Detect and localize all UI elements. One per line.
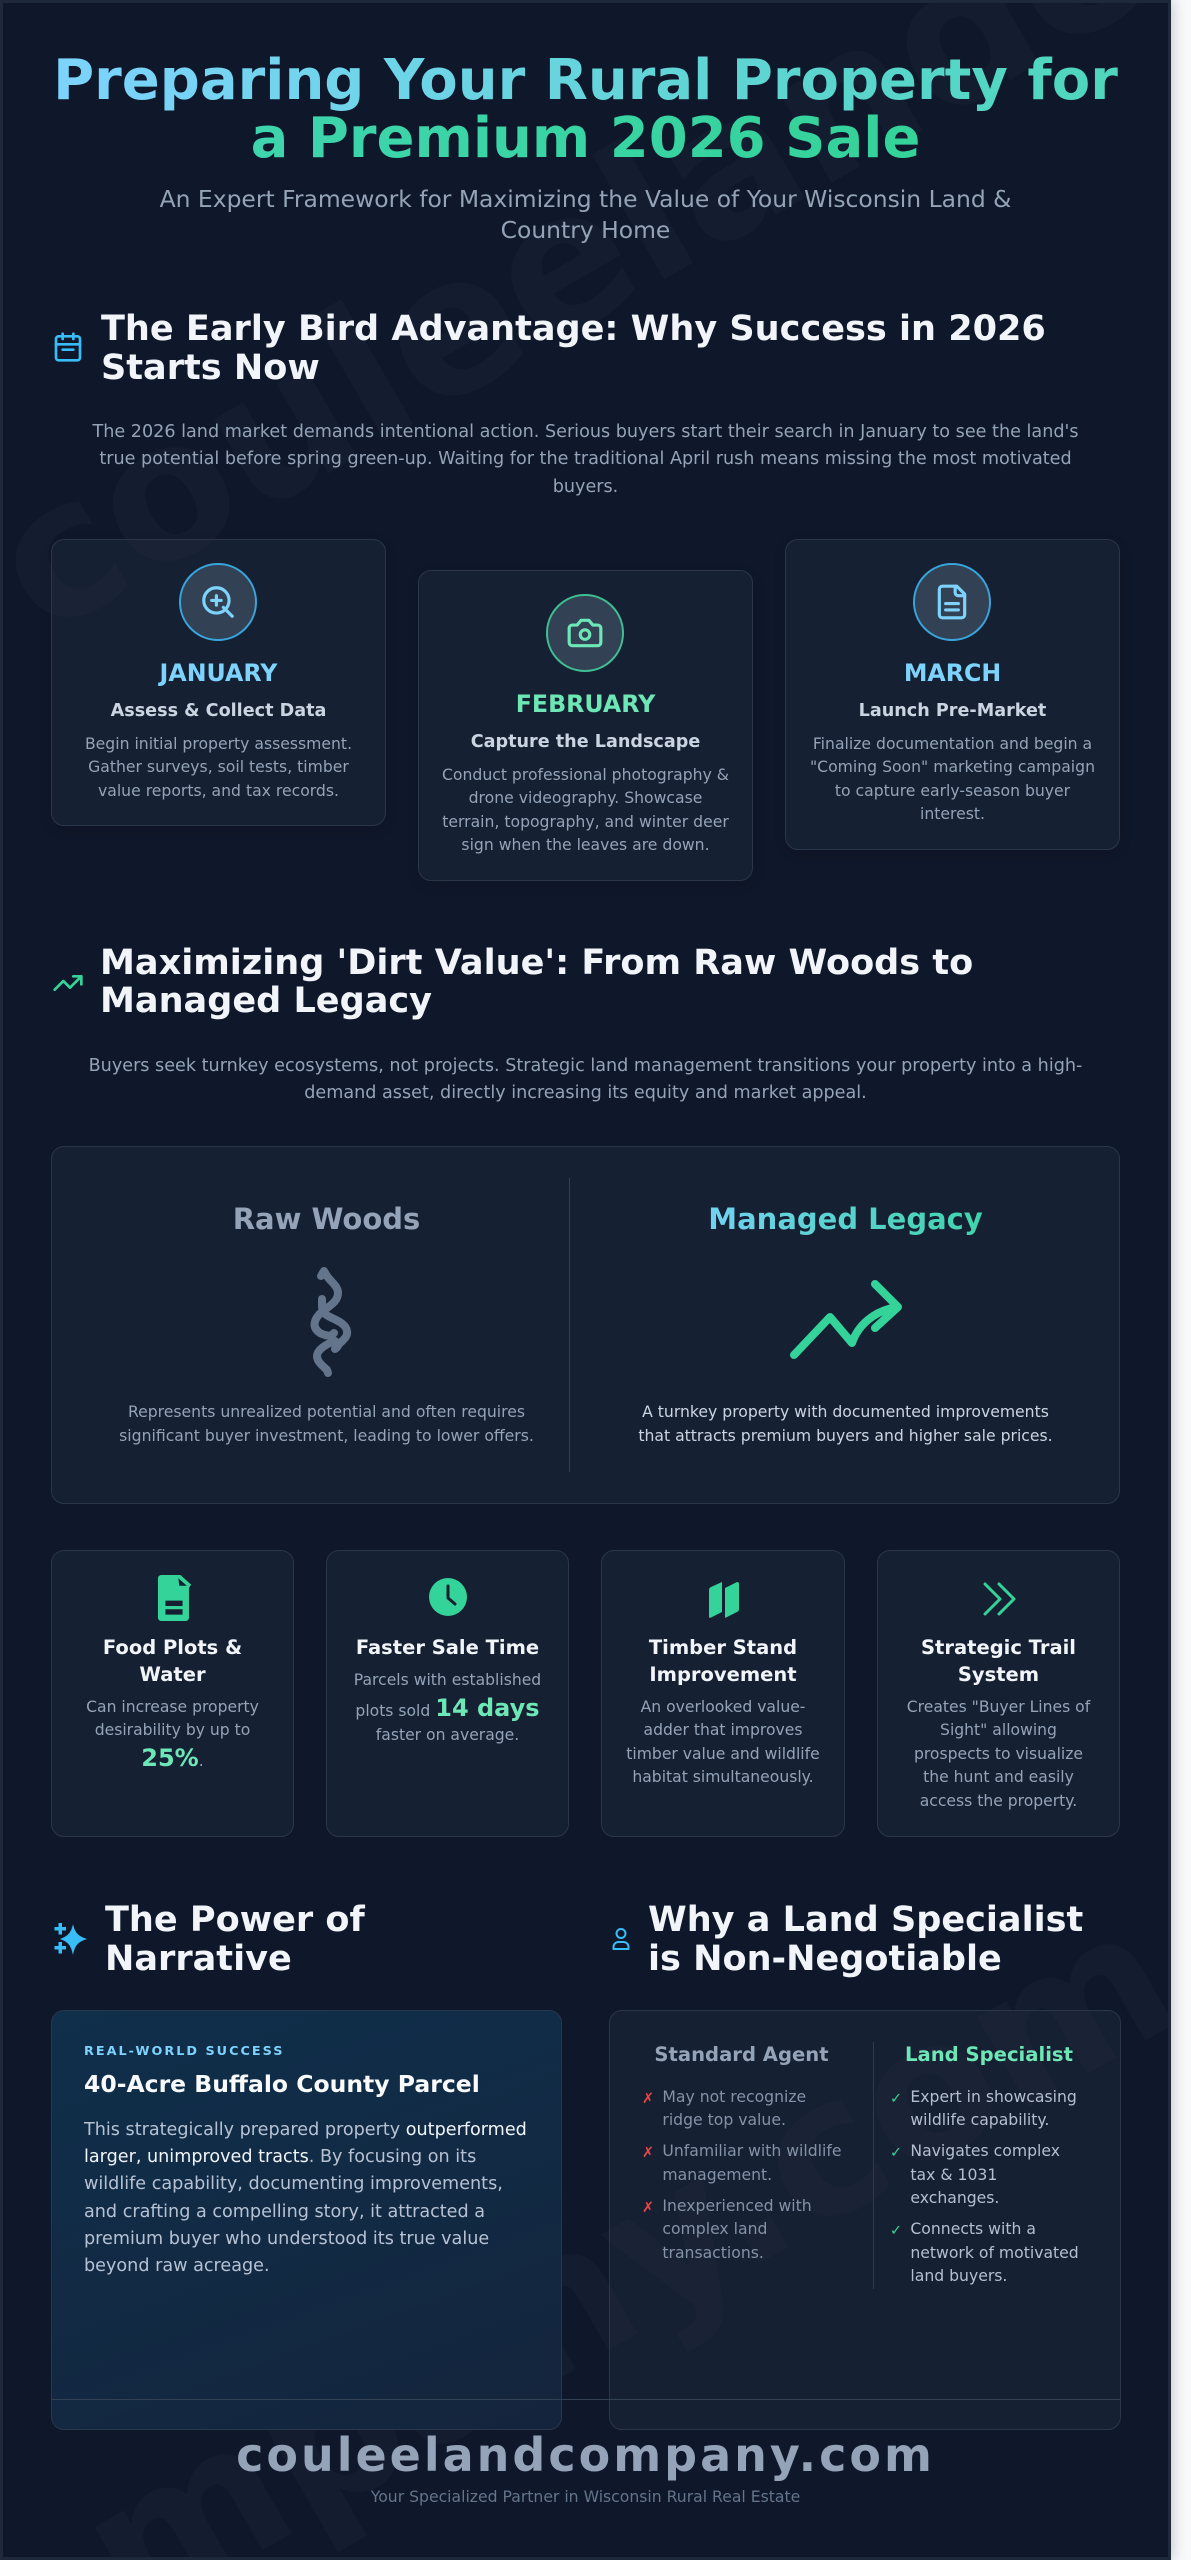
text — [626, 1698, 820, 1786]
step text: Conduct professional photography & — [442, 765, 729, 784]
text: managed legacy — [638, 1402, 1053, 1445]
title: Strategic Trail — [921, 1636, 1076, 1659]
subtitle: An Expert Framework for Maximizing the Value of Your Wisconsin Land & — [160, 185, 1011, 213]
panel: timber stand — [601, 1550, 845, 1837]
step text: to capture early-season buyer — [835, 781, 1070, 800]
text: managed legacy: that attracts premium buyers and higher sale prices. — [638, 1426, 1053, 1445]
text: Can increase property — [86, 1698, 259, 1716]
step text: interest. — [920, 804, 985, 823]
step text: "Coming Soon" marketing campaign — [810, 757, 1095, 776]
panel: faster sale — [326, 1550, 569, 1837]
month label: MARCH — [904, 659, 1001, 687]
icon: trending up — [53, 974, 83, 992]
text: early bird intro — [92, 422, 1079, 497]
step text: Begin initial property assessment. — [85, 734, 352, 753]
text: prospects to visualize — [914, 1745, 1083, 1763]
case text: This strategically prepared property outperformed — [84, 2120, 527, 2140]
text: 25%. — [141, 1744, 204, 1772]
icon: user — [612, 1928, 630, 1950]
text: timber value and wildlife — [626, 1745, 820, 1763]
title: System — [958, 1663, 1039, 1686]
footer url: couleelandcompany.com — [236, 2428, 935, 2482]
step text: drone videography. Showcase — [469, 788, 702, 807]
text: plots sold 14 days — [355, 1694, 540, 1722]
title: Improvement — [649, 1663, 797, 1686]
text: Sight" allowing — [940, 1721, 1057, 1739]
list: standard agent — [642, 2087, 842, 2262]
panel: agent comparison — [609, 2010, 1121, 2430]
panel: february — [418, 570, 753, 881]
list: land specialist: ✓ — [890, 2223, 902, 2239]
step title: Capture the Landscape — [471, 732, 700, 752]
heading: managed legacy: Managed Legacy — [708, 1202, 983, 1236]
heading: narrative: Narrative — [105, 1938, 292, 1979]
icon: calendar — [54, 332, 82, 362]
list: standard agent: Inexperienced with — [662, 2196, 812, 2215]
step text: Finalize documentation and begin a — [813, 734, 1092, 753]
month label: JANUARY — [160, 659, 277, 687]
title — [921, 1636, 1076, 1686]
text: Parcels with established — [354, 1671, 541, 1689]
text: early bird intro: The 2026 land market demands intentional action. Serious buyers start their search in January to see the land's — [92, 422, 1079, 442]
list: land specialist: ✓ — [890, 2145, 902, 2161]
text: dirt value intro: demand asset, directly increasing its equity and market appeal. — [304, 1083, 867, 1103]
step text: sign when the leaves are down. — [461, 835, 710, 854]
text: faster on average. — [376, 1726, 519, 1744]
icon: double chevron — [983, 1582, 1016, 1616]
text — [907, 1698, 1091, 1810]
list: standard agent: Unfamiliar with wildlife — [662, 2141, 842, 2160]
icon: map — [709, 1582, 739, 1618]
step text: Gather surveys, soil tests, timber — [88, 757, 349, 776]
case text: beyond raw acreage. — [84, 2256, 270, 2276]
list: land specialist: ✓ — [890, 2090, 902, 2106]
list: land specialist: Navigates complex — [910, 2141, 1060, 2160]
subtitle: Country Home — [501, 216, 670, 244]
heading: dirt value: Maximizing 'Dirt Value': From Raw Woods to — [100, 942, 973, 982]
list: standard agent: ✗ — [642, 2145, 654, 2161]
heading: early bird: Starts Now — [101, 347, 320, 388]
heading: dirt value: Managed Legacy — [100, 980, 432, 1021]
panel: raw woods vs managed legacy — [51, 1146, 1120, 1504]
text: Creates "Buyer Lines of — [907, 1698, 1090, 1716]
footer rule — [51, 2399, 1120, 2400]
heading: dirt value — [100, 942, 973, 1021]
column heading: standard agent: Standard Agent — [654, 2043, 829, 2066]
step text — [85, 734, 352, 800]
list: standard agent: May not recognize — [662, 2087, 806, 2106]
title — [53, 48, 1118, 171]
month label: FEBRUARY — [516, 690, 655, 718]
text: raw woods: Represents unrealized potential and often requires — [128, 1402, 525, 1421]
icon: rising arrow — [790, 1280, 902, 1359]
list: standard agent: transactions. — [662, 2243, 764, 2262]
icon: magnifier — [179, 563, 257, 641]
panel: case study — [51, 2010, 562, 2430]
list: standard agent: ✗ — [642, 2090, 654, 2106]
list: land specialist — [890, 2087, 1079, 2285]
heading: raw woods: Raw Woods — [233, 1202, 420, 1236]
subtitle — [160, 185, 1011, 244]
step title: Launch Pre-Market — [859, 701, 1046, 721]
heading: early bird — [101, 308, 1046, 388]
icon: document — [913, 563, 991, 641]
case text: wildlife capability, documenting improvements, — [84, 2174, 503, 2194]
list: standard agent: ✗ — [642, 2200, 654, 2216]
icon: filled document — [158, 1575, 192, 1621]
text: An overlooked value- — [641, 1698, 805, 1716]
text: managed legacy: A turnkey property with documented improvements — [642, 1402, 1049, 1421]
list: land specialist: network of motivated — [910, 2243, 1079, 2262]
eyebrow: REAL-WORLD SUCCESS — [84, 2044, 284, 2059]
title: a Premium 2026 Sale — [251, 106, 920, 171]
case text: premium buyer who understood its true value — [84, 2229, 489, 2249]
title — [648, 1636, 797, 1686]
heading: land specialist: is Non-Negotiable — [648, 1938, 1002, 1979]
text: dirt value intro: Buyers seek turnkey ecosystems, not projects. Strategic land management transitions your property into a high- — [89, 1056, 1082, 1076]
divider — [569, 1178, 570, 1472]
title: Timber Stand — [649, 1636, 797, 1659]
text: raw woods: significant buyer investment, leading to lower offers. — [119, 1426, 534, 1445]
heading: narrative: The Power of — [105, 1899, 365, 1940]
title: Faster Sale Time — [356, 1636, 539, 1659]
panel: food plots — [51, 1550, 294, 1837]
heading: land specialist: Why a Land Specialist — [648, 1899, 1083, 1940]
column heading: land specialist: Land Specialist — [905, 2043, 1073, 2066]
text: desirability by up to — [95, 1721, 250, 1739]
title: Preparing Your Rural Property for — [53, 48, 1118, 113]
heading: narrative — [105, 1899, 366, 1979]
step text — [442, 765, 729, 854]
text: access the property. — [920, 1792, 1077, 1810]
footer tagline: Your Specialized Partner in Wisconsin Rural Real Estate — [371, 2487, 800, 2506]
text: dirt value intro — [89, 1056, 1082, 1103]
text: raw woods — [119, 1402, 534, 1445]
case text: larger, unimproved tracts. By focusing on its — [84, 2147, 476, 2167]
icon: sparkles — [54, 1923, 87, 1955]
case title: 40-Acre Buffalo County Parcel — [84, 2070, 480, 2098]
text: early bird intro: buyers. — [553, 477, 618, 497]
icon: clock — [429, 1578, 467, 1616]
text — [354, 1671, 541, 1744]
text: habitat simultaneously. — [632, 1768, 814, 1786]
icon: camera — [546, 594, 624, 672]
heading: early bird: The Early Bird Advantage: Why Success in 2026 — [101, 308, 1046, 349]
heading: land specialist — [648, 1899, 1083, 1979]
step text: terrain, topography, and winter deer — [442, 812, 729, 831]
list: standard agent: management. — [662, 2165, 772, 2184]
panel: trail system — [877, 1550, 1120, 1837]
text: early bird intro: true potential before spring green-up. Waiting for the traditional April rush means missing the most motivated — [99, 449, 1072, 469]
step text: value reports, and tax records. — [98, 781, 339, 800]
list: land specialist: exchanges. — [910, 2188, 999, 2207]
list: land specialist: tax & 1031 — [910, 2165, 997, 2184]
panel: march — [785, 539, 1120, 850]
panel: january — [51, 539, 386, 826]
title — [103, 1636, 242, 1686]
title: Water — [139, 1663, 206, 1686]
case text: and crafting a compelling story, it attracted a — [84, 2202, 485, 2222]
case text — [84, 2120, 527, 2276]
list: land specialist: wildlife capability. — [910, 2110, 1049, 2129]
text — [86, 1698, 259, 1772]
text: adder that improves — [644, 1721, 802, 1739]
list: standard agent: complex land — [662, 2219, 767, 2238]
title: Food Plots & — [103, 1636, 242, 1659]
list: land specialist: Connects with a — [910, 2219, 1036, 2238]
divider — [873, 2042, 874, 2288]
step title: Assess & Collect Data — [111, 701, 326, 721]
list: land specialist: Expert in showcasing — [910, 2087, 1077, 2106]
text: the hunt and easily — [923, 1768, 1074, 1786]
step text — [810, 734, 1095, 823]
icon: tangled path — [310, 1267, 352, 1377]
list: land specialist: land buyers. — [910, 2266, 1007, 2285]
list: standard agent: ridge top value. — [662, 2110, 786, 2129]
